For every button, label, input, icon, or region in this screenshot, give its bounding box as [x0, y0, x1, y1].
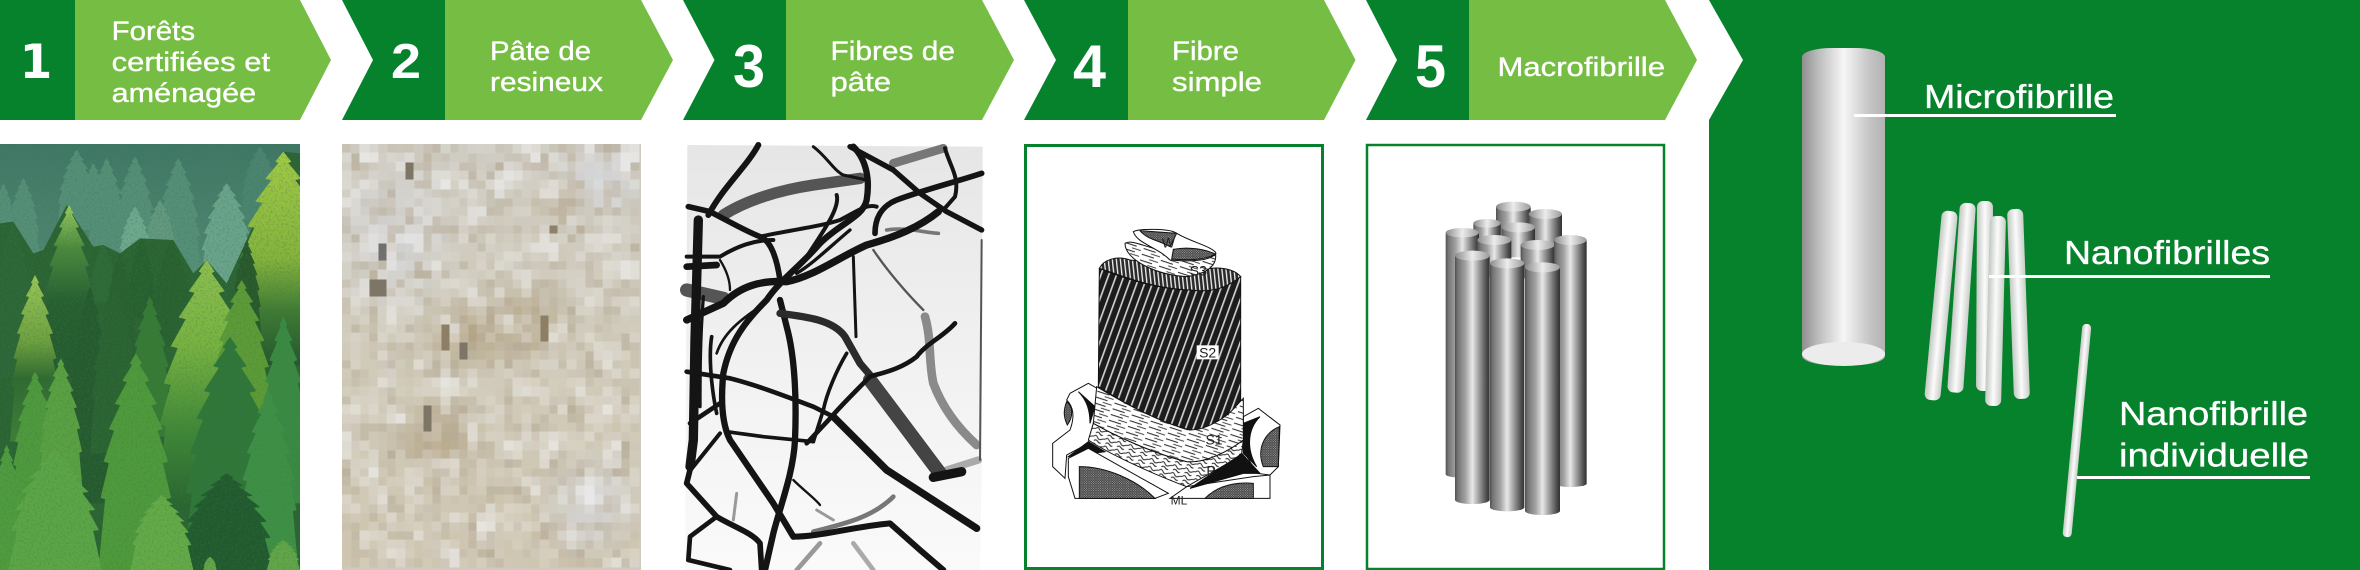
- layer labels: S3: [1190, 263, 1207, 279]
- chevron 2: Pâte de resineux: 2: [391, 35, 421, 89]
- panel: nano-scale components: [1709, 0, 2360, 570]
- label: Nanofibrille individuelle: individuelle: [2119, 436, 2309, 474]
- chevron 4: Fibre simple: simple: [1172, 67, 1262, 97]
- layer labels: S1: [1205, 432, 1223, 448]
- dark forest mass below the ridge line: [0, 152, 300, 570]
- chevron 1: Forêts certifiées et aménagée: [0, 0, 331, 120]
- microfibril cylinder: [1802, 48, 1885, 366]
- chevron 5: Macrofibrille: Macrofibrille: [1498, 52, 1665, 82]
- chevron 2: Pâte de resineux: resineux: [490, 67, 603, 97]
- label: Nanofibrilles: [1989, 234, 2270, 278]
- chevron 4: Fibre simple: Fibre: [1172, 36, 1239, 66]
- label: Nanofibrille individuelle: Nanofibrille: [2119, 395, 2308, 432]
- panel: single fibre diagram: [1026, 146, 1322, 568]
- chevron 5: Macrofibrille: [1366, 0, 1697, 120]
- chevron 1: Forêts certifiées et aménagée: aménagée: [112, 78, 256, 108]
- photo: conifer forest: [0, 144, 333, 570]
- label: Microfibrille: [1854, 78, 2116, 117]
- label: Microfibrille: Microfibrille: [1924, 78, 2114, 115]
- single nanofibril: [2062, 324, 2091, 537]
- layer labels: S2: [1199, 344, 1216, 360]
- micrograph: pulp fibres: [685, 145, 983, 570]
- chevron 4: Fibre simple: 4: [1073, 33, 1107, 100]
- cell wall layers illustration: [1053, 229, 1280, 498]
- chevron 3: Fibres de pâte: Fibres de: [830, 36, 955, 66]
- layer labels: ML: [1171, 494, 1188, 508]
- chevron 3: Fibres de pâte: [683, 0, 1014, 120]
- layer labels: [1162, 234, 1223, 508]
- chevron 3: Fibres de pâte: 3: [733, 33, 765, 100]
- photo: softwood pulp texture: [325, 130, 655, 570]
- layer labels: P: [1206, 463, 1216, 479]
- chevron 4: Fibre simple: [1024, 0, 1356, 120]
- chevron 1: Forêts certifiées et aménagée: 1: [20, 35, 52, 90]
- chevron 1: Forêts certifiées et aménagée: certifiées et: [112, 47, 271, 77]
- label: Nanofibrille individuelle: [2077, 395, 2310, 479]
- chevron 3: Fibres de pâte: pâte: [830, 67, 891, 97]
- panel: macrofibril bundle: [1367, 145, 1664, 569]
- chevron 1: Forêts certifiées et aménagée: Forêts: [112, 16, 195, 46]
- layer labels: W: [1162, 234, 1176, 250]
- nanofibrils bundle: [1924, 201, 2030, 406]
- label: Nanofibrilles: Nanofibrilles: [2064, 234, 2270, 271]
- back cylinders: [1446, 202, 1587, 487]
- chevron 2: Pâte de resineux: Pâte de: [490, 36, 591, 66]
- chevron 5: Macrofibrille: 5: [1415, 33, 1446, 100]
- chevron 2: Pâte de resineux: [342, 0, 673, 120]
- front cylinders: [1455, 251, 1560, 515]
